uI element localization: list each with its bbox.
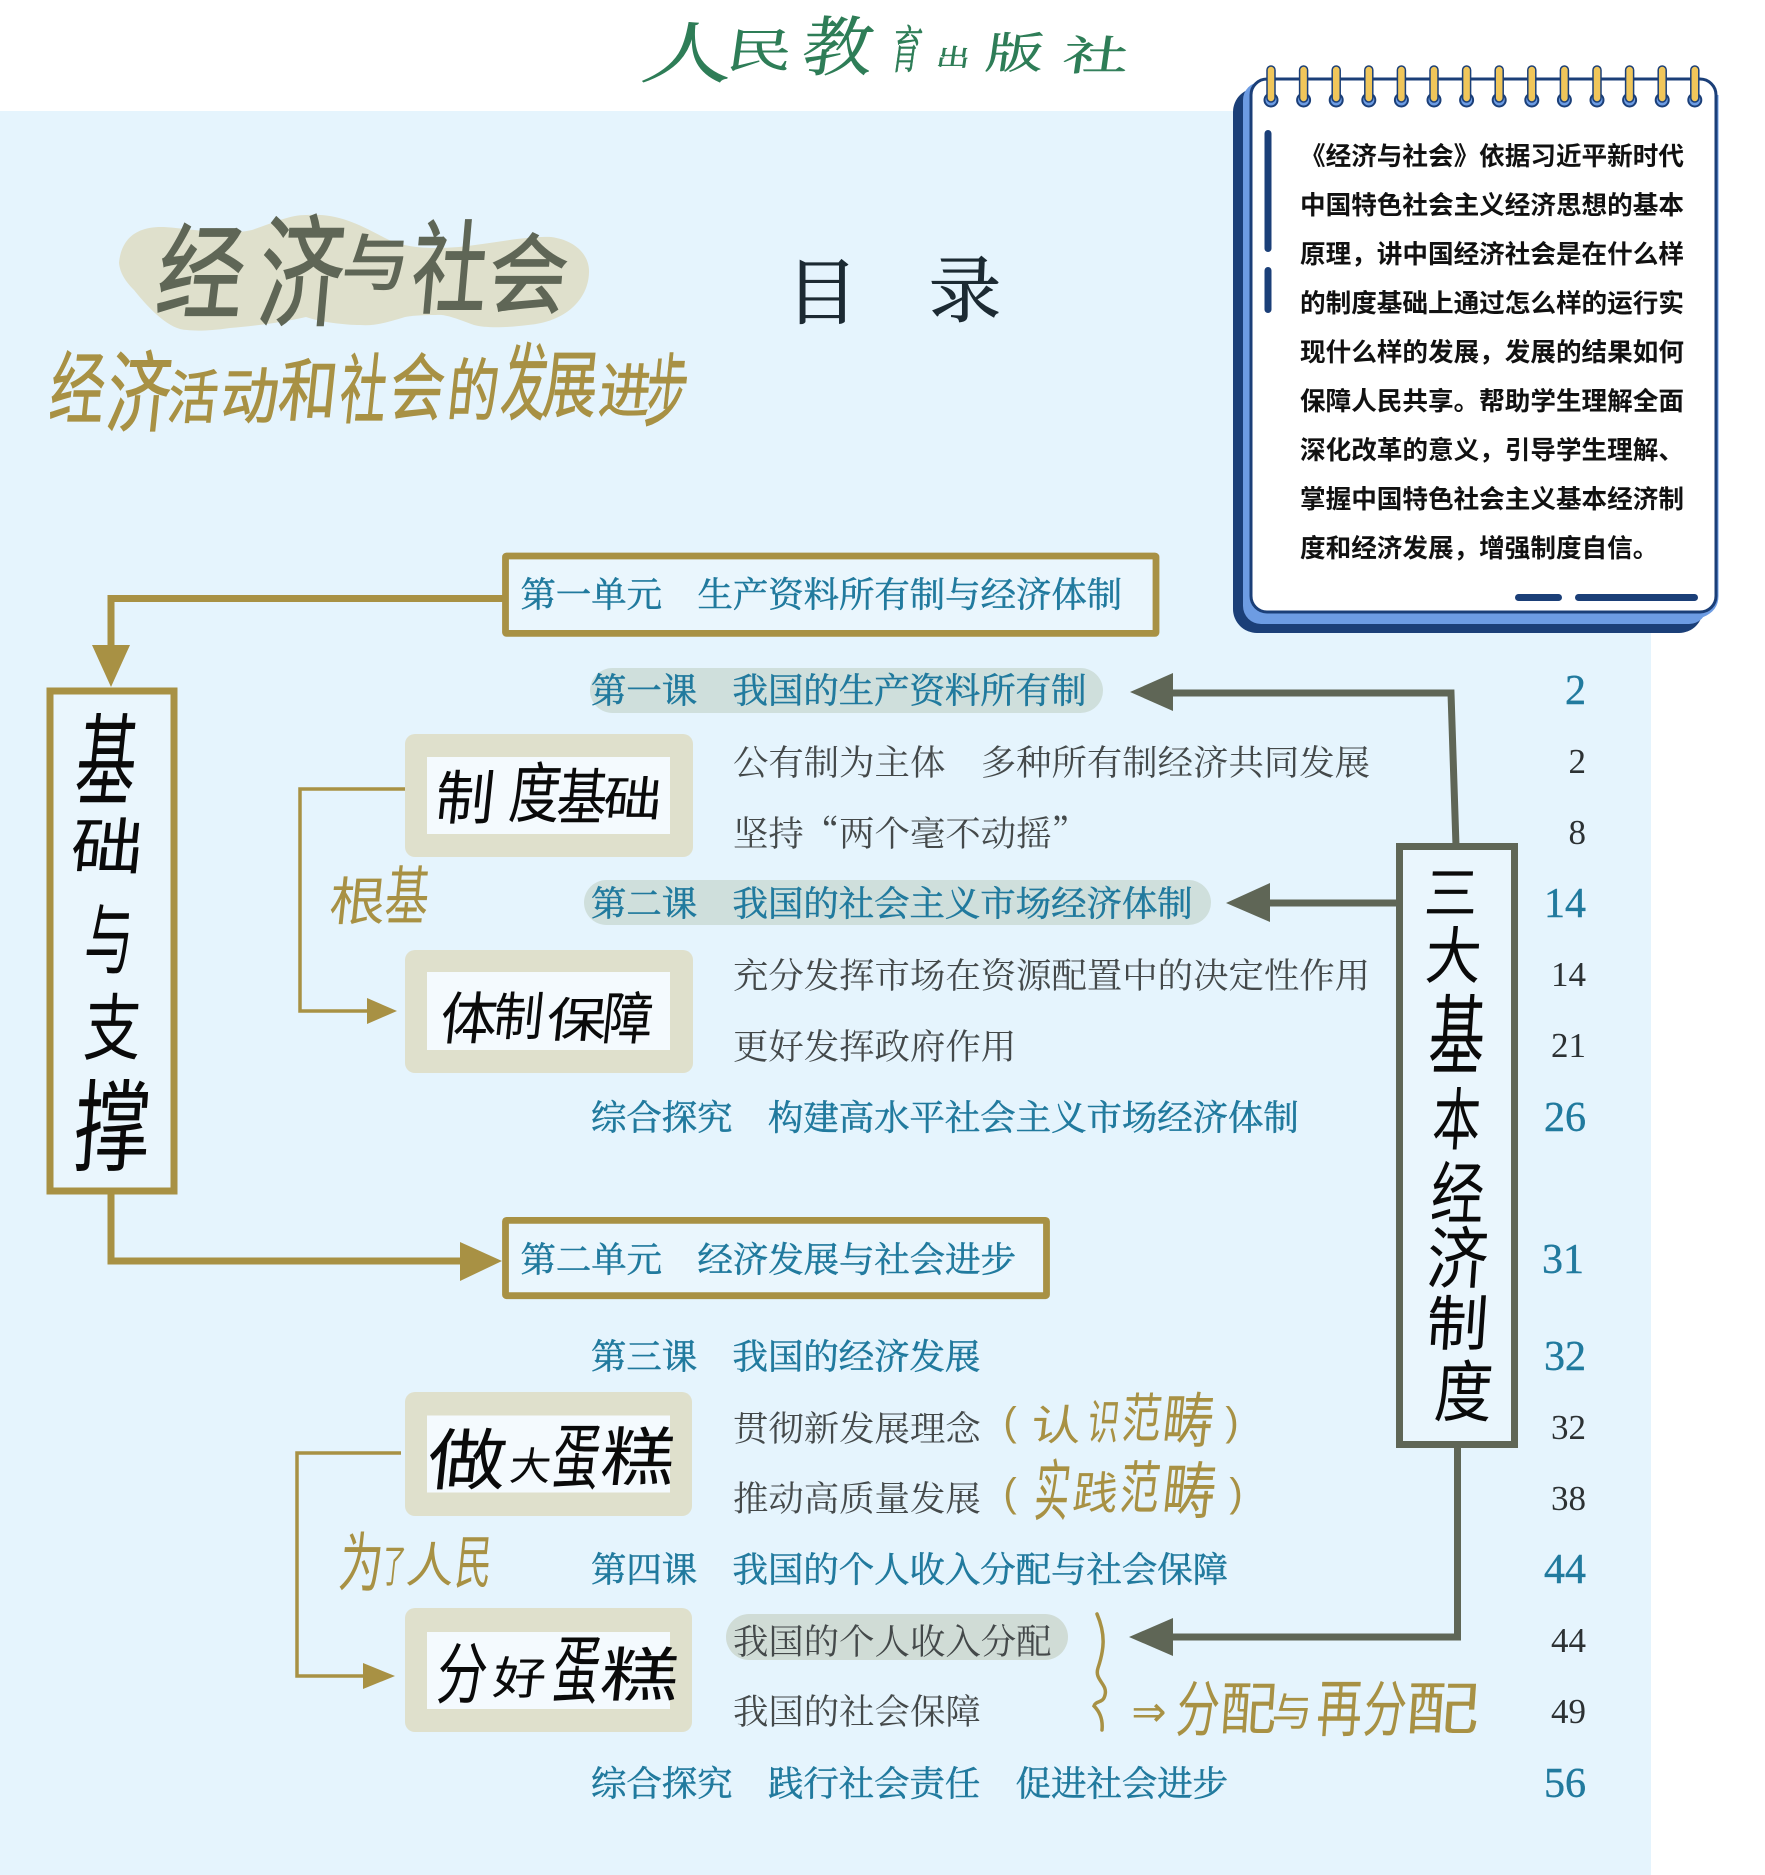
title: 经济与社会: 社 [408,213,492,327]
foundation box: 基础与支撑: 与 [82,897,136,985]
lesson three heading: 第三课 我国的经济发展 [591,1329,980,1380]
title: 经济与社会: 会 [485,227,572,325]
foundation box: 基础与支撑: 支 [81,988,144,1070]
topic: 社会保障: 我国的社会保障 [733,1684,981,1735]
note: 分配与再分配: ⇒ [1131,1687,1167,1736]
box: 分好蛋糕: 蛋 [549,1630,604,1714]
arrow: unit one to foundation box [92,598,503,687]
box: 做大蛋糕: 做 [424,1424,511,1499]
box: 体制保障: 障 [600,988,656,1052]
publisher logo: 社 [1060,23,1133,82]
box: 制度基础: 础 [601,773,665,827]
page number 32: 32 [1544,1334,1586,1380]
box: 三大基本经济制度: 三 [1423,862,1480,925]
topic pill: 个人收入分配: 我国的个人收入分配 [733,1614,1052,1665]
note: 实践范畴: 实 [1031,1455,1074,1530]
title: 经济与社会 [151,208,572,344]
box: 做大蛋糕: 糕 [598,1422,679,1494]
notebook text: 深化改革的意义，引导学生理解、 [1300,436,1684,465]
box: 三大基本经济制度: 度 [1432,1356,1495,1431]
box: 体制保障 [405,950,693,1073]
box: 制度基础: 度 [506,757,565,832]
arrow: foundation box to unit two [111,1194,502,1281]
connector arrow: 为了人民 [297,1453,401,1689]
note: 分配与再分配: 配 [1403,1678,1482,1742]
page number 8: 8 [1568,813,1586,852]
comprehensive inquiry two: 综合探究 践行社会责任 促进社会进步 [591,1756,1228,1807]
curly brace [1094,1614,1105,1730]
arrow: to lesson one [1130,673,1456,846]
notebook text: 保障人民共享。帮助学生理解全面 [1300,387,1684,416]
note: 分配与再分配: 分 [1360,1677,1410,1745]
note: 分配与再分配: 分 [1173,1677,1223,1745]
page number 44: 44 [1551,1621,1586,1660]
notebook text: 中国特色社会主义经济思想的基本 [1300,191,1684,220]
box: 做大蛋糕: 蛋 [549,1418,604,1498]
page number 2: 2 [1565,668,1586,714]
subtitle: 经济活动和社会的发展进步: 活 [165,367,221,431]
foundation box: 基础与支撑: 基 [71,706,143,819]
label: 为了人民: 人 [404,1539,458,1593]
notebook text: 掌握中国特色社会主义基本经济制 [1300,485,1684,514]
box: 体制保障: 制 [491,988,547,1046]
lesson four heading: 第四课 我国的个人收入分配与社会保障 [591,1542,1228,1593]
subtitle: 经济活动和社会的发展进步: 动 [218,363,282,431]
notebook text: 《经济与社会》依据习近平新时代 [1300,142,1684,171]
arrow: to income distribution [1129,1448,1458,1656]
note: 分配与再分配: 再 [1314,1674,1365,1745]
note: 实践范畴: 范 [1117,1458,1163,1521]
box: 三大基本经济制度 [1400,846,1514,1444]
box: 制度基础: 基 [554,763,611,832]
page number 14: 14 [1544,881,1586,927]
note: 实践范畴: 践 [1070,1468,1121,1519]
page number 21: 21 [1551,1026,1586,1065]
topic: 高质量发展: 推动高质量发展 [733,1471,981,1522]
subtitle: 经济活动和社会的发展进步 [46,339,692,445]
title: 经济与社会: 经 [151,218,252,333]
note: 认识范畴: 范 [1119,1389,1165,1448]
label: 为了人民: 了 [380,1542,407,1592]
box: 三大基本经济制度: 基 [1426,989,1488,1086]
unit one box: 第一单元 生产资料所有制与经济体制 [520,567,1122,618]
heading: 目录: 目 [786,235,858,339]
notebook text: 度和经济发展，增强制度自信。 [1300,534,1658,563]
page number 44: 44 [1544,1547,1586,1593]
topic: 新发展理念: 贯彻新发展理念 [733,1401,981,1452]
page number 2: 2 [1568,742,1586,781]
notebook text: 现什么样的发展，发展的结果如何 [1300,338,1684,367]
box: 三大基本经济制度: 济 [1424,1221,1491,1298]
page number 49: 49 [1551,1692,1586,1731]
page number 26: 26 [1544,1095,1586,1141]
publisher logo: 育 [887,11,927,84]
topic: 政府作用: 更好发挥政府作用 [733,1019,1016,1070]
box: 三大基本经济制度: 制 [1424,1291,1491,1358]
box: 三大基本经济制度: 大 [1423,922,1484,992]
lesson two pill [584,880,1211,925]
notebook text [1300,142,1684,563]
foundation box: 基础与支撑: 撑 [71,1072,154,1184]
note: 实践范畴 [1003,1455,1243,1530]
subtitle: 经济活动和社会的发展进步: 展 [539,345,602,427]
box: 体制保障: 保 [544,994,610,1048]
label: 根基: 根 [326,873,389,931]
subtitle: 经济活动和社会的发展进步: 进 [596,359,654,425]
title blob [119,215,589,331]
note: 认识范畴: 认 [1029,1402,1084,1449]
subtitle: 经济活动和社会的发展进步: 和 [275,354,342,430]
box: 分好蛋糕: 分 [433,1637,492,1713]
note: 实践范畴: ( [1003,1471,1017,1515]
note: 认识范畴: ) [1225,1400,1239,1444]
label: 为了人民: 民 [453,1532,495,1596]
lesson one heading: 第一课 我国的生产资料所有制 [591,663,1086,714]
box: 三大基本经济制度: 本 [1430,1084,1483,1159]
note: 认识范畴: ( [1003,1400,1017,1444]
box: 制度基础: 制 [432,765,498,832]
note: 实践范畴: ) [1229,1471,1243,1515]
subtitle: 经济活动和社会的发展进步: 的 [444,354,503,430]
box: 分好蛋糕 [405,1608,692,1732]
topic: 决定性作用: 充分发挥市场在资源配置中的决定性作用 [733,948,1370,999]
subtitle: 经济活动和社会的发展进步: 步 [641,348,692,437]
box: 做大蛋糕 [405,1392,692,1516]
note: 分配与再分配 [1131,1674,1482,1745]
label: 为了人民: 为 [336,1527,387,1600]
box: 分好蛋糕: 糕 [597,1643,683,1709]
page number 32: 32 [1551,1408,1586,1447]
note: 分配与再分配: 与 [1270,1691,1313,1735]
publisher logo: 民 [722,15,797,81]
unit two box [506,1220,1046,1296]
box: 三大基本经济制度: 经 [1428,1157,1487,1232]
note: 认识范畴 [1003,1387,1239,1455]
topic: 两个毫不动摇: 坚持“两个毫不动摇” [733,806,1087,857]
notebook text: 的制度基础上通过怎么样的运行实 [1300,289,1684,318]
label: 根基 [326,861,433,933]
subtitle: 经济活动和社会的发展进步: 会 [386,348,449,430]
lesson one pill [590,668,1103,713]
note: 分配与再分配: 配 [1218,1678,1279,1742]
note: 实践范畴: 畴 [1159,1457,1220,1527]
arrow: to lesson two [1226,883,1396,922]
label: 为了人民 [336,1527,495,1600]
notebook panel: book intro [1233,66,1717,633]
note: 认识范畴: 识 [1085,1395,1122,1450]
label: 根基: 基 [382,861,433,933]
page number 56: 56 [1544,1761,1586,1807]
note: 认识范畴: 畴 [1159,1387,1217,1455]
unit two box: 第二单元 经济发展与社会进步 [520,1232,1016,1283]
topic: 公有制: 公有制为主体 多种所有制经济共同发展 [733,735,1370,786]
heading: 目录 second character: 录 [929,233,1001,337]
publisher logo: 版 [983,19,1048,81]
subtitle: 经济活动和社会的发展进步: 济 [102,346,176,445]
foundation box: 基础与支撑: 础 [67,814,147,883]
title: 经济与社会: 济 [254,208,350,344]
notebook text: 原理，讲中国经济社会是在什么样 [1300,240,1684,269]
box: 分好蛋糕: 好 [490,1654,549,1704]
subtitle: 经济活动和社会的发展进步: 经 [46,346,110,434]
publisher logo [636,0,1133,96]
page number 38: 38 [1551,1479,1586,1518]
publisher logo: 出 [934,39,973,73]
foundation box: 基础与支撑 [50,691,174,1191]
comprehensive inquiry one: 综合探究 构建高水平社会主义市场经济体制 [591,1090,1299,1141]
page number 31: 31 [1542,1237,1584,1283]
box: 制度基础 [405,734,693,857]
box: 做大蛋糕: 大 [507,1445,553,1489]
publisher logo: 人 [636,0,744,96]
subtitle: 经济活动和社会的发展进步: 社 [336,350,391,434]
subtitle: 经济活动和社会的发展进步: 发 [497,339,552,432]
unit one box [506,556,1156,633]
connector arrow: 根基 [300,789,405,1024]
page number 14: 14 [1551,955,1586,994]
lesson two heading: 第二课 我国的社会主义市场经济体制 [591,876,1193,927]
box: 体制保障: 体 [437,988,501,1052]
title: 经济与社会: 与 [340,229,412,298]
